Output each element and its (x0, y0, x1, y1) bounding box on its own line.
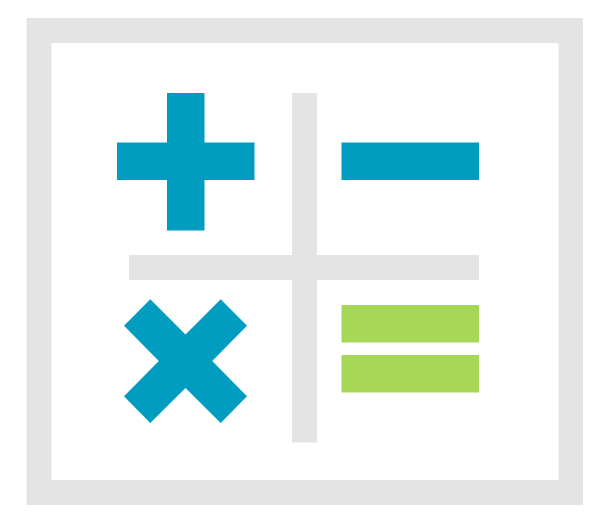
icon: plus sign (117, 93, 254, 230)
equals bottom bar (342, 355, 479, 392)
vertical grid bar (292, 93, 317, 442)
icon: minus sign (342, 142, 479, 180)
equals top bar (342, 305, 479, 342)
horizontal grid bar (129, 255, 479, 280)
icon: equals sign (342, 305, 479, 392)
icon: multiplication sign (124, 299, 247, 423)
